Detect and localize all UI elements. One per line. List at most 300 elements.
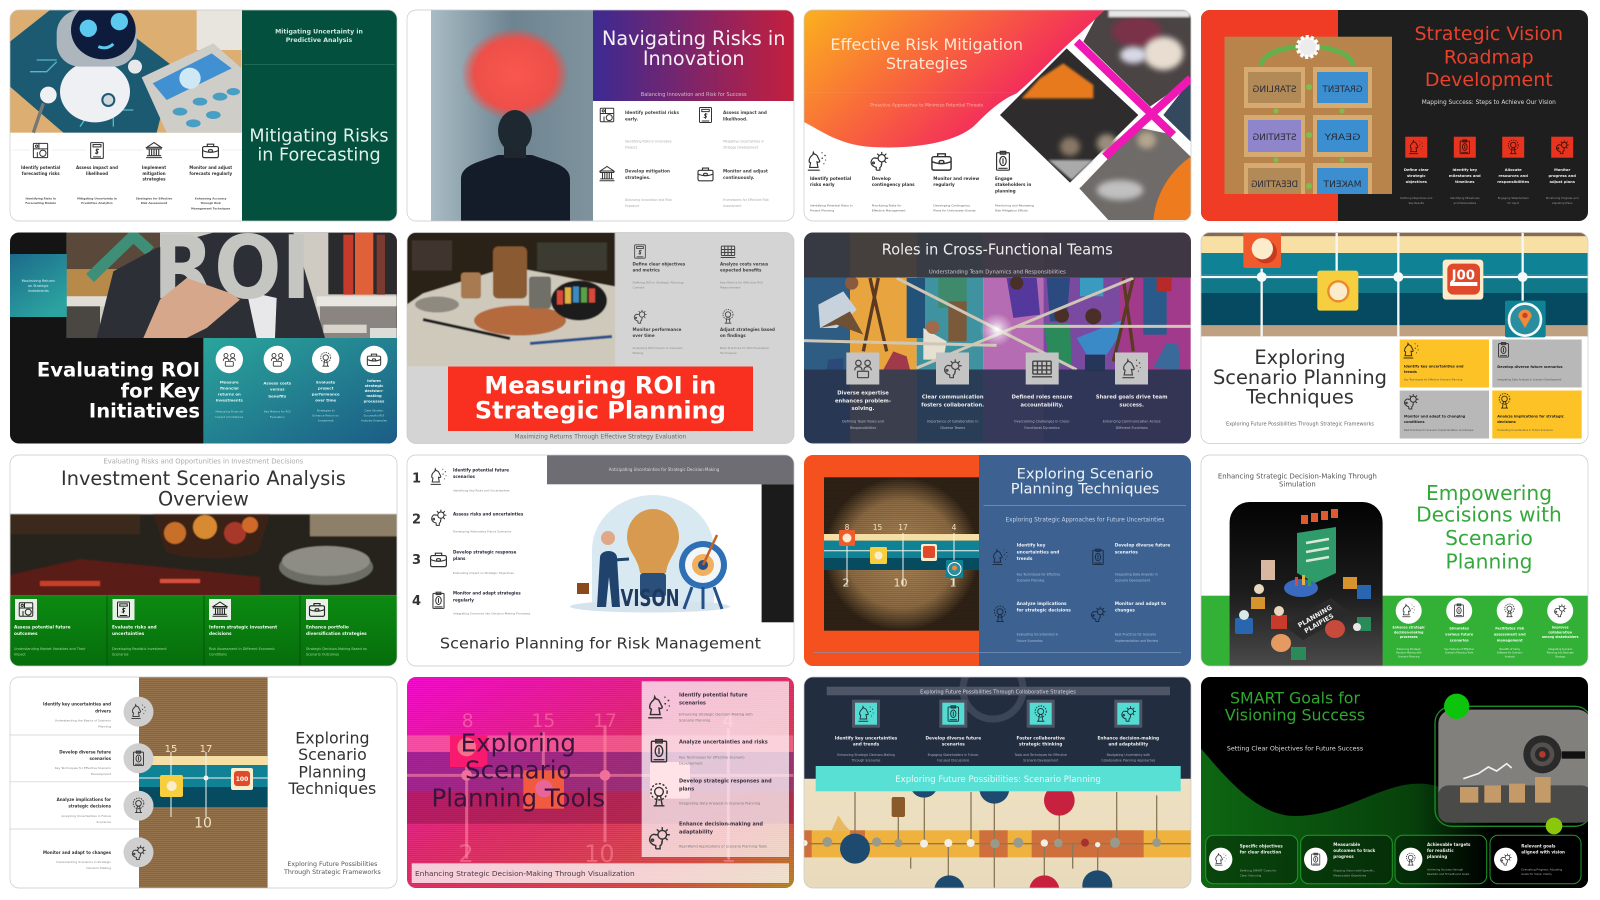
item: enhance — [650, 821, 767, 849]
item: assess: Mitigating Uncertainty in — [77, 196, 117, 200]
item: foster — [1014, 700, 1067, 763]
item: monitor: Monitoring Progress and — [1546, 196, 1579, 200]
card: relevant — [1490, 835, 1581, 884]
item: identify: Identify potential risks — [625, 110, 679, 115]
item: develop — [871, 152, 915, 213]
item: enhance: diversification strategies — [306, 631, 367, 637]
item: define: objectives — [1406, 180, 1428, 184]
item 1: Identify potential future — [453, 467, 509, 472]
item: diverse expertise: enhances problem- — [835, 398, 891, 404]
item: defined roles: accountability. — [1021, 402, 1064, 408]
photo: wooden tiles: GRATENT — [1322, 85, 1362, 95]
item: analyze: expected benefits — [720, 268, 762, 272]
item: define: Key Results — [1409, 201, 1425, 205]
item: facilitates: management — [1497, 639, 1523, 643]
photo: man facing red sphere — [431, 10, 593, 221]
photo: blurred diamonds — [1000, 10, 1191, 220]
item: implement — [136, 140, 172, 205]
item: assess: Impact — [14, 653, 26, 657]
panel: Evaluating ROI slide — [10, 217, 397, 444]
item 1: 1 — [412, 471, 421, 486]
title band — [804, 232, 1191, 278]
card: relevant: Evaluating Progress: Adjusting — [1521, 868, 1562, 872]
tile: develop — [1492, 340, 1582, 388]
item: facilitates: assessment and — [1494, 633, 1526, 637]
photo: wooden tiles: STARLING — [1252, 85, 1296, 95]
item: identify: Identifying Potential Risks in — [810, 204, 853, 208]
item: identify: Identify key — [1017, 543, 1046, 549]
card: measurable — [1301, 835, 1392, 884]
item: milestones — [1449, 137, 1481, 205]
item: monitor: Assessment — [723, 204, 742, 208]
subtitle: Mapping Success: Steps to Achieve Our Vision — [1422, 100, 1556, 106]
item: analyze: strategic decisions — [68, 804, 112, 809]
teal title banner: Exploring Future Possibilities: Scenario Planning — [895, 775, 1101, 785]
title: Planning — [1446, 549, 1532, 573]
top dark band — [804, 659, 1191, 779]
item: monitor — [1092, 601, 1166, 643]
subtitle: Simulation — [1279, 481, 1316, 489]
timeline photo: 8 — [845, 523, 850, 532]
item: develop — [600, 166, 672, 208]
item: adjust: on findings — [720, 333, 746, 338]
panel: Exploring Future Possibilities slide — [802, 659, 1191, 900]
item: facilitates: Software for Scenario — [1497, 652, 1523, 655]
item: facilitates: Benefits of Using — [1500, 648, 1520, 651]
item: measure: investments — [216, 398, 244, 402]
item: improves: Planning into Business — [1547, 652, 1574, 655]
subtitle: Setting Clear Objectives for Future Success — [1227, 745, 1363, 752]
item: develop: Balancing Innovation and Risk — [625, 198, 672, 202]
item: assess: versus — [270, 386, 285, 392]
item: allocate — [1497, 137, 1530, 205]
item: foster: Scenario Development — [1023, 759, 1059, 763]
item: improves: Improves — [1552, 626, 1569, 630]
red title box: Strategic Planning — [475, 396, 726, 424]
item: inform: Inform strategic investment — [209, 624, 277, 630]
header band — [593, 10, 794, 101]
item: monitor: over time — [632, 333, 655, 338]
title: Initiatives — [89, 400, 200, 422]
item: assess: Predictive Analytics — [81, 201, 113, 205]
photo: wooden bars and target — [1435, 694, 1592, 834]
title: Effective Risk Mitigation — [830, 35, 1023, 54]
item: evaluate — [312, 346, 340, 422]
item: develop — [55, 743, 154, 776]
teal panel with items — [203, 338, 397, 444]
item: evaluate: uncertainties — [112, 631, 145, 637]
item: monitor: adjust plans — [1549, 180, 1576, 184]
item: shared goals: Shared goals drive team — [1096, 394, 1168, 400]
item 2: Assess risks and uncertainties — [453, 512, 524, 517]
item: identify: Identify potential future — [679, 692, 748, 698]
item: identify: Identify potential — [810, 176, 852, 181]
item: identify: risks early — [810, 182, 835, 187]
item: monitor: Frameworks for Effective Risk — [723, 198, 769, 202]
item: define: Defining Objectives and — [1400, 196, 1433, 200]
illustration: timeline with tiles — [1201, 231, 1588, 337]
item: improves: Integrating Scenario — [1548, 648, 1573, 651]
subtitle bar: Enhancing Strategic Decision-Making Through Visualization — [415, 869, 635, 878]
title: Navigating Risks in — [602, 27, 785, 50]
item: clear communication: fosters collaboration. — [921, 402, 984, 408]
title: Exploring Scenario — [1017, 465, 1153, 482]
item: evaluate: Evaluate — [316, 380, 336, 384]
tile: monitor: Monitor and adapt to changing — [1404, 414, 1466, 418]
item: engage: Risk Mitigation Efforts — [995, 209, 1028, 213]
item: define: strategic — [1407, 174, 1426, 178]
bottom band with items — [804, 352, 1191, 444]
item: inform — [360, 346, 388, 422]
item: shared goals: Enhancing Communication Across — [1103, 420, 1161, 424]
item: monitor: Monitor and review — [933, 176, 979, 181]
item: identify — [21, 140, 61, 205]
item: identify: uncertainties and — [1017, 549, 1059, 555]
photo: team on scaffolding — [804, 233, 1191, 443]
timeline photo: 100 — [236, 776, 248, 783]
item: implement: Risk Assessment — [141, 201, 168, 205]
item: evaluate — [112, 599, 167, 657]
item: measure: Measure — [220, 380, 239, 384]
subtitle: Enhancing Strategic Decision-Making Through — [1218, 472, 1377, 480]
red title box — [448, 366, 753, 431]
title: Techniques — [1245, 386, 1354, 409]
item: analyze: for strategic decisions — [1017, 608, 1071, 614]
item: engage: Engage — [995, 176, 1013, 181]
item 4: Monitor and adapt strategies — [453, 590, 521, 595]
title: Roles in Cross-Functional Teams — [882, 241, 1113, 259]
item: inform: Case Studies: — [364, 408, 384, 412]
item: milestones: Identify key — [1452, 168, 1478, 172]
item: evaluate: Developing Realistic Investment — [112, 647, 167, 651]
item: enhance: Enhance decision-making — [1097, 736, 1159, 742]
card: achievable: Achievable targets — [1427, 842, 1471, 847]
panel: Exploring Scenario Planning Techniques blue slide — [804, 455, 1191, 666]
item: assess: Assess impact and — [723, 110, 767, 115]
panel: Effective Risk Mitigation Strategies slide — [803, 10, 1191, 221]
item: evaluate: performance — [312, 392, 340, 396]
item: identify — [648, 692, 753, 723]
item: identify: Scenario Planning — [1017, 579, 1044, 583]
timeline photo: 2 — [842, 577, 850, 590]
item: develop — [1093, 543, 1170, 583]
green strip with items — [10, 596, 397, 666]
item: adjust: Techniques — [719, 351, 737, 355]
title: Scenario — [1445, 526, 1533, 550]
item: develop — [925, 700, 981, 763]
item: milestones: timelines — [1455, 180, 1475, 184]
item: inform: decision- — [365, 389, 384, 393]
item 2: Developing Alternative Future Scenarios — [453, 530, 512, 534]
title: Scenario Planning — [1213, 366, 1387, 389]
teal tag: Maximizing Returns — [22, 279, 55, 283]
item: defined roles: Overcoming Challenges in Cross- — [1014, 420, 1071, 424]
item: identify: trends — [1017, 556, 1033, 562]
item: assess: Key Metrics for ROI — [264, 410, 291, 414]
subtitle: Through Strategic Frameworks — [283, 869, 381, 876]
item: identify: Through Scenarios — [851, 759, 881, 763]
item: assess: likelihood. — [723, 117, 748, 122]
tile: monitor — [1400, 390, 1489, 438]
card: relevant: aligned with vision — [1521, 849, 1565, 854]
title: Innovation — [643, 47, 744, 70]
card: specific: for clear direction — [1240, 849, 1281, 854]
title: Strategies — [886, 54, 968, 73]
item: monitor: Making — [632, 351, 643, 355]
tile: develop: Develop diverse future scenarios — [1497, 365, 1563, 369]
red title box: Measuring ROI in — [484, 371, 716, 399]
item: develop: Develop strategic responses and — [679, 779, 772, 785]
item 3: Develop strategic response — [453, 549, 517, 554]
item: identify — [43, 697, 154, 728]
card: achievable: planning — [1427, 854, 1447, 859]
item: define: Define clear — [1404, 168, 1429, 172]
item: monitor — [1546, 137, 1579, 205]
item: analyze: Evaluating Uncertainties in — [1017, 633, 1058, 637]
item: inform: Conditions — [209, 653, 227, 657]
title: Scenario Planning for Risk Management — [440, 634, 761, 652]
item: identify: Planning — [98, 724, 111, 728]
item 4: Integrating Scenarios into Decision-Making Processes — [453, 612, 531, 616]
item: clear communication: Clear communication — [922, 394, 984, 400]
timeline photo: 1 — [950, 577, 956, 590]
item: monitor: regularly — [933, 182, 955, 187]
item: develop: Integrating Data Analysis in Scenario Planning — [679, 802, 760, 806]
item: simulates: Key Features of Effective — [1444, 648, 1475, 651]
item: identify: Key Techniques for Effective — [1017, 573, 1060, 577]
title: Exploring — [461, 728, 576, 757]
item 2: 2 — [412, 512, 421, 527]
teal title banner — [816, 766, 1181, 791]
item: analyze: Development — [679, 762, 703, 766]
item: analyze: Analyzing Uncertainties in Future — [61, 814, 111, 818]
item: milestones: and Deliverables — [1453, 201, 1477, 205]
item: shared goals — [1096, 352, 1168, 430]
subtitle: Maximizing Returns Through Effective Strategy Evaluation — [514, 434, 687, 440]
item: identify: Understanding the Basics of Scenario — [55, 719, 111, 723]
item: develop: Develop mitigation — [625, 168, 670, 173]
background timeline overlay: 2 — [458, 840, 474, 868]
item: implement: Strategies for Effective — [136, 196, 172, 200]
item: identify — [600, 108, 679, 149]
item: develop: strategies. — [625, 175, 651, 180]
panel: Roles in Cross-Functional Teams slide — [804, 232, 1191, 444]
item: assess — [76, 140, 118, 205]
item: enhance — [1097, 700, 1159, 763]
item: monitor: Monitor — [1554, 168, 1570, 172]
item: allocate: Allocate — [1505, 168, 1522, 172]
item: allocate: Engaging Stakeholders — [1498, 196, 1529, 200]
background timeline overlay: 4 — [722, 711, 734, 732]
item 1: scenarios — [453, 474, 476, 479]
tile: identify: Key Techniques for Effective Scenario Planning — [1404, 378, 1463, 382]
item: evaluate: Scenarios — [112, 653, 129, 657]
tile: identify: Identify key uncertainties and — [1404, 364, 1464, 368]
item: enhance: processes — [1400, 635, 1418, 639]
title: Techniques — [288, 779, 376, 798]
item: develop: Development — [91, 772, 112, 776]
photo: fruit basket and coins — [10, 514, 397, 596]
item: enhance: Real-World Applications of Scenario Planning Tools — [679, 845, 767, 849]
item: assess: Evaluation — [270, 415, 285, 419]
item: inform — [209, 599, 277, 657]
item: define — [632, 245, 686, 290]
item: assess: Understanding Market Variables and Their — [14, 647, 86, 651]
tile: analyze — [1492, 390, 1582, 438]
tile: monitor: conditions — [1404, 420, 1425, 424]
grey header bar — [547, 455, 794, 484]
title: Exploring — [295, 728, 370, 747]
item: defined roles: Defined roles ensure — [1012, 394, 1073, 400]
tile: analyze: decisions — [1497, 420, 1516, 424]
item: monitor: Plans for Unforeseen Events — [933, 209, 976, 213]
panel: Exploring Scenario Planning Techniques grid slide — [1201, 231, 1588, 444]
item: clear communication: Diverse Teams — [940, 426, 965, 430]
item: foster: Tools and Techniques for Effective — [1014, 753, 1067, 757]
title: for Key — [121, 380, 200, 402]
item: define: Context — [632, 286, 645, 290]
background timeline overlay — [407, 711, 793, 868]
photo: wooden tiles: STENTING — [1252, 133, 1296, 143]
item: enhance: Scenario Outcomes — [306, 653, 339, 657]
item: engage: Monitoring and Reviewing — [995, 204, 1034, 208]
item: inform: Inform — [367, 379, 381, 383]
item: monitor: Implementing Scenarios in Strategic — [56, 860, 111, 864]
title: Planning Techniques — [1011, 480, 1159, 497]
subtitle: Mitigating Uncertainty in — [275, 28, 363, 36]
item 3: plans — [453, 556, 466, 561]
item: develop: plans — [679, 786, 694, 792]
item: inform: decisions — [209, 631, 232, 637]
item: enhance: Enhancing Strategic — [1397, 648, 1421, 651]
item: analyze — [994, 601, 1071, 643]
title: Mitigating Risks — [249, 127, 389, 147]
timeline photo — [824, 477, 979, 631]
item: monitor: Adjusting Plans — [1552, 201, 1573, 205]
item: develop: Prioritizing Risks for — [872, 204, 902, 208]
card: specific: Specific objectives — [1240, 843, 1283, 848]
photo: wooden tiles: GEARY — [1324, 133, 1360, 143]
item: identify: Projects — [625, 145, 638, 149]
title: Exploring — [1254, 346, 1346, 369]
item: assess: Assess impact and — [76, 165, 118, 170]
illustration: vision bulb: VISON — [620, 586, 680, 612]
item: assess: likelihood — [86, 171, 108, 176]
item: assess: Assess costs — [263, 380, 292, 386]
item: simulates: Simulates — [1449, 626, 1469, 630]
title: in Forecasting — [257, 146, 381, 166]
item: analyze: Analyze uncertainties and risks — [679, 739, 768, 745]
panel: SMART Goals slide — [1201, 677, 1592, 889]
card: measurable: outcomes to track — [1333, 848, 1375, 853]
card: achievable: Realistic and Time-Bound Goals — [1427, 872, 1470, 876]
photo: hand holding ROI letters — [66, 232, 397, 338]
item: diverse expertise: Defining Team Roles and — [842, 420, 884, 424]
item: monitor: forecasts regularly — [189, 171, 232, 176]
item: monitor: Decision-Making — [86, 866, 111, 870]
grey header bar: Anticipating Uncertainties for Strategic Decision-Making — [609, 467, 720, 472]
teal tag — [10, 254, 67, 317]
item: enhance: adaptability — [679, 829, 714, 835]
photo: hand holding ROI letters: ROI — [153, 217, 311, 319]
tile: identify: trends — [1404, 370, 1417, 374]
item: diverse expertise: Diverse expertise — [837, 390, 889, 396]
item: monitor — [632, 310, 683, 355]
card: specific: Defining SMART Goals for — [1240, 868, 1277, 872]
item: identify: forecasting risks — [22, 171, 60, 176]
panel: Scenario Planning for Risk Management slide — [407, 455, 794, 666]
item: diverse expertise: Responsibilities — [850, 426, 876, 430]
item: develop: Scenario Development — [1115, 579, 1151, 583]
item: assess — [700, 108, 767, 149]
item: inform: strategic — [365, 384, 383, 388]
item 3: 3 — [412, 553, 421, 568]
item: define: and metrics — [632, 268, 660, 272]
item: engage — [995, 151, 1034, 213]
subtitle: Balancing Innovation and Risk for Success — [641, 92, 747, 98]
item: identify: drivers — [95, 708, 112, 713]
background timeline overlay: 17 — [593, 711, 617, 732]
subtitle: Exploring Strategic Approaches for Future Uncertainties — [1006, 518, 1164, 524]
item: defined roles: Functional Dynamics — [1024, 426, 1060, 430]
tile: analyze: Evaluating Uncertainties in Future Scenarios — [1497, 428, 1553, 432]
item: implement: mitigation — [142, 171, 166, 176]
header bar — [827, 687, 1170, 695]
card: relevant: Goals for Vision Clarity — [1521, 872, 1552, 876]
item: develop: Develop diverse future — [925, 736, 981, 742]
item: measure — [215, 346, 244, 419]
panel: Empowering Decisions slide — [1201, 455, 1588, 666]
item 1 — [412, 467, 510, 493]
panel: Investment Scenario Analysis slide — [10, 455, 397, 666]
item: implement: strategies — [143, 177, 166, 182]
item: monitor: Implementation and Review — [1115, 639, 1159, 643]
title: Development — [1425, 69, 1553, 91]
card: achievable: for realistic — [1427, 848, 1454, 853]
item: develop: scenarios — [942, 742, 965, 748]
item: analyze: Key Techniques for Effective Scenario — [679, 755, 745, 759]
tile: analyze: Analyze implications for strategic — [1497, 414, 1564, 418]
item: simulates: Scenario Planning Tools — [1445, 652, 1474, 655]
item: analyze — [57, 791, 154, 824]
item: monitor: Enhancing Accuracy — [195, 196, 227, 200]
title: Scenario — [465, 756, 572, 785]
item: monitor: Best Practices for Scenario — [1115, 633, 1156, 637]
item: identify — [808, 152, 853, 213]
item: measure: financial — [220, 386, 239, 390]
item: develop: Engaging Stakeholders in Future- — [928, 753, 979, 757]
background timeline overlay: 10 — [584, 840, 615, 868]
timeline photo — [139, 677, 268, 888]
card: measurable: Measurable Objectives — [1333, 874, 1367, 878]
gradient blob — [803, 10, 1105, 147]
item: enhance: and adaptability — [1108, 742, 1148, 748]
item: simulates: various future — [1445, 633, 1474, 637]
item: enhance: Navigating Uncertainty with — [1107, 753, 1150, 757]
item: diverse expertise — [835, 352, 891, 430]
item 4 — [412, 590, 531, 616]
timeline photo: 17 — [898, 523, 908, 532]
photo: wooden tiles — [1224, 37, 1392, 194]
item 4: regularly — [453, 597, 474, 602]
item: develop: scenarios — [90, 756, 112, 761]
item: enhance: Decision-Making with — [1396, 652, 1422, 655]
item: implement: Implement — [142, 165, 166, 170]
item: assess: outcomes — [14, 631, 38, 637]
item: identify: Scenario Planning — [679, 719, 710, 723]
item: enhance — [306, 599, 367, 657]
item: evaluate: over time — [315, 398, 337, 402]
